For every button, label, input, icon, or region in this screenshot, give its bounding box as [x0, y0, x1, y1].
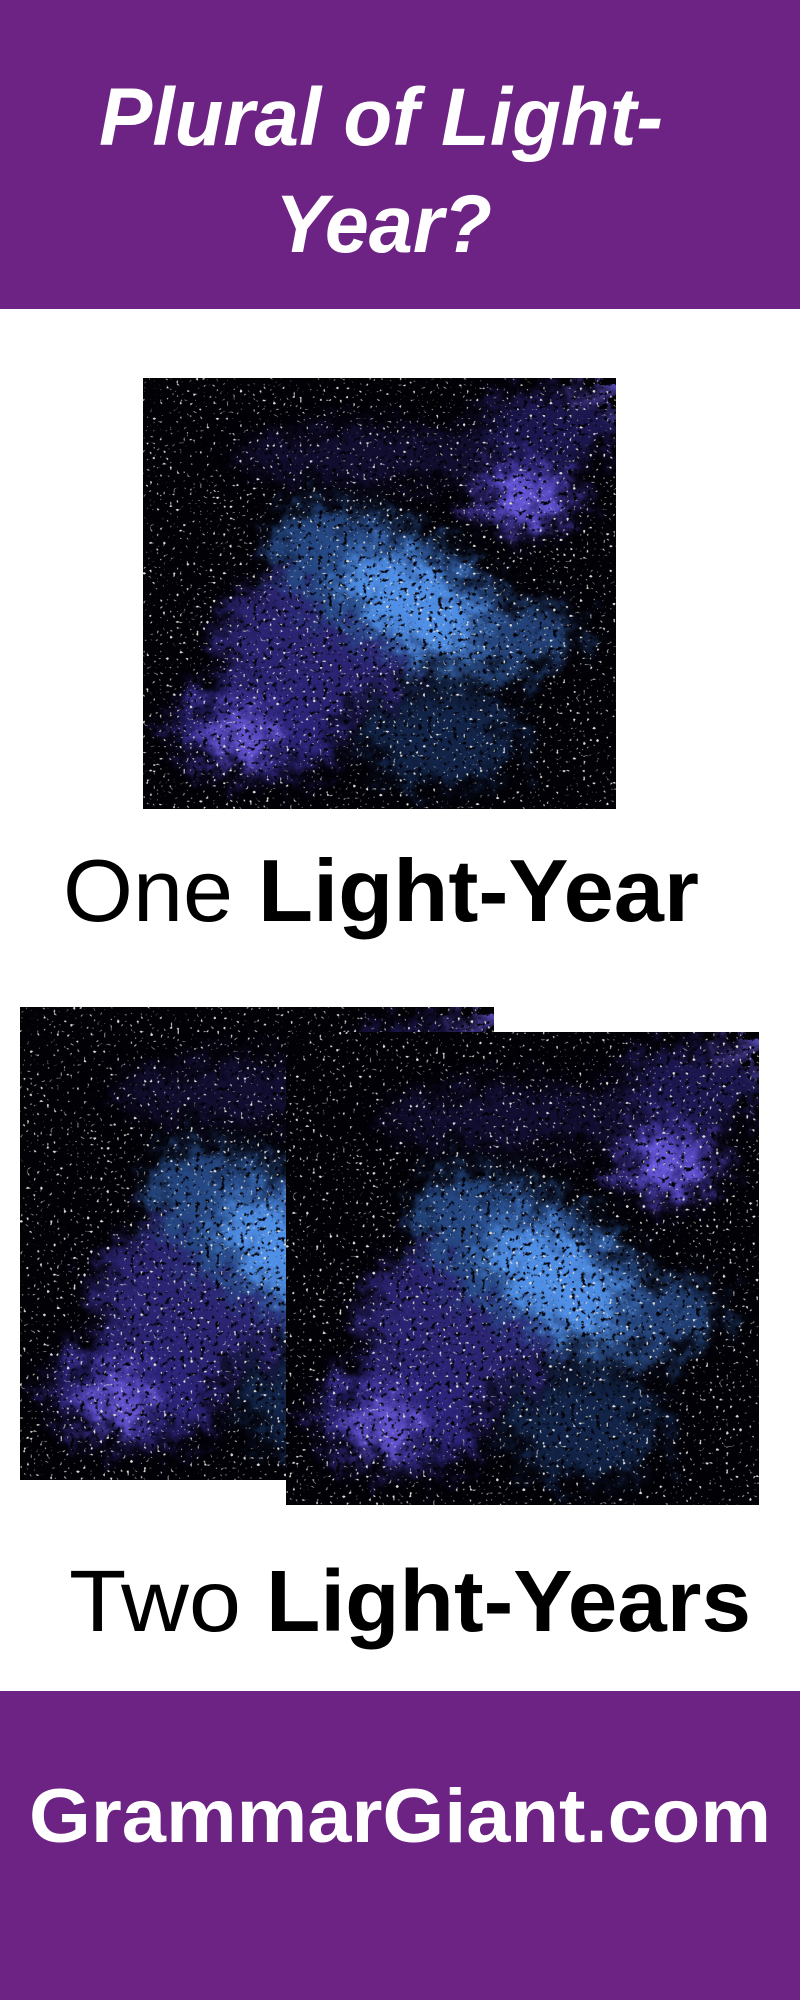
- label: Two Light-Years: [69, 1553, 751, 1650]
- title: Plural of Light-: [99, 72, 663, 163]
- image: single starfield representing one light-year: [143, 362, 643, 809]
- footer banner: [0, 1691, 800, 2000]
- image: front starfield of the two-light-year pair: [286, 1014, 786, 1505]
- label: Two Light-Years: Light-Years: [266, 1553, 751, 1650]
- label: One Light-Year: [63, 841, 699, 940]
- title: Year?: [275, 179, 492, 270]
- header banner: [0, 0, 800, 309]
- label: Two Light-Years: Two: [69, 1553, 241, 1650]
- image: back starfield of the two-light-year pair: [20, 989, 521, 1480]
- title: [99, 72, 663, 270]
- label: One Light-Year: One: [63, 841, 233, 940]
- label: One Light-Year: Light-Year: [258, 841, 699, 940]
- website address: GrammarGiant.com: [29, 1774, 771, 1859]
